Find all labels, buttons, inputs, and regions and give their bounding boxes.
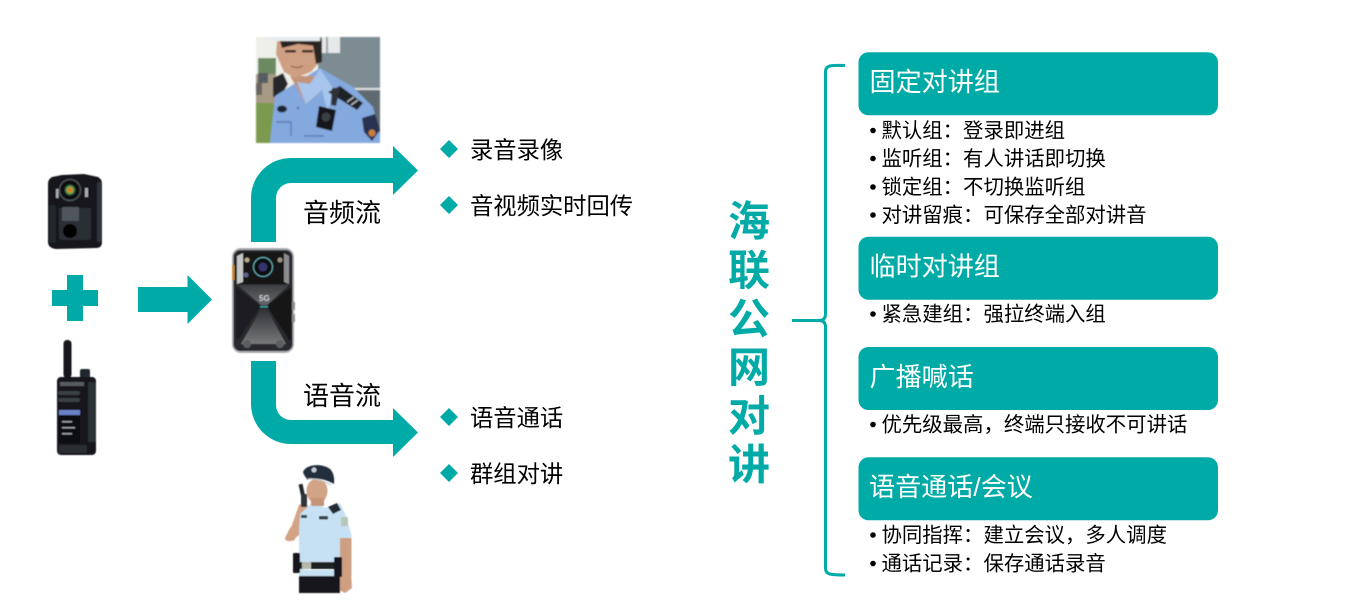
label: audio stream: 音频流 (303, 198, 381, 228)
list: conference items: 协同指挥：建立会议，多人调度 (882, 524, 1167, 547)
label: voice stream: 语音流 (303, 381, 381, 411)
arrow: combine into device (138, 275, 212, 324)
icon: plus sign (52, 275, 98, 321)
list: fixed group items: 对讲留痕：可保存全部对讲音 (882, 204, 1147, 227)
arrow: audio and video stream (251, 146, 418, 242)
heading: fixed talk group (858, 52, 1218, 115)
list: audio video features (440, 137, 633, 219)
item: group talk: 群组对讲 (470, 461, 563, 487)
title: vertical product name: 对 (728, 393, 770, 440)
list: fixed group items: 默认组：登录即进组 (882, 120, 1065, 142)
title: vertical product name: 网 (728, 344, 770, 391)
icon: walkie-talkie (57, 340, 96, 455)
bracket (792, 65, 845, 575)
list: broadcast items: 优先级最高，终端只接收不可讲话 (882, 414, 1187, 436)
photo: officer using radio (285, 465, 352, 593)
title: vertical product name: 联 (728, 247, 770, 294)
heading: fixed talk group: 固定对讲组 (870, 67, 1000, 97)
title: vertical product name: 讲 (728, 442, 770, 488)
panel: voice call and conference (858, 457, 1218, 576)
item: real-time return: 音视频实时回传 (470, 193, 633, 219)
title: vertical product name: 公 (728, 296, 770, 342)
panel: fixed talk group (858, 52, 1218, 227)
list: temporary group items: 紧急建组：强拉终端入组 (882, 303, 1106, 326)
icon: 5G body camera (232, 248, 295, 353)
list: voice features (440, 405, 563, 487)
list: conference items: 通话记录：保存通话录音 (882, 552, 1106, 576)
photo: officer wearing camera (256, 36, 382, 143)
list: fixed group items (870, 120, 1147, 227)
icon: 5G body camera: 5G (259, 294, 270, 303)
item: recording: 录音录像 (470, 137, 563, 163)
heading: voice call and conference (858, 457, 1218, 520)
heading: broadcast (858, 347, 1218, 410)
heading: broadcast: 广播喊话 (870, 362, 974, 392)
list: fixed group items: 监听组：有人讲话即切换 (882, 148, 1106, 170)
panel: broadcast (858, 347, 1218, 436)
heading: temporary talk group (858, 237, 1218, 300)
item: voice call: 语音通话 (470, 405, 563, 431)
icon: body camera (48, 174, 102, 249)
heading: voice call and conference: 语音通话/会议 (869, 472, 1033, 502)
title: vertical product name: 海 (728, 198, 770, 245)
panel: temporary talk group (858, 237, 1218, 326)
list: fixed group items: 锁定组：不切换监听组 (882, 176, 1085, 199)
title: vertical product name (728, 198, 770, 488)
heading: temporary talk group: 临时对讲组 (870, 252, 1000, 282)
list: conference items (870, 524, 1167, 576)
arrow: voice stream (251, 361, 418, 457)
